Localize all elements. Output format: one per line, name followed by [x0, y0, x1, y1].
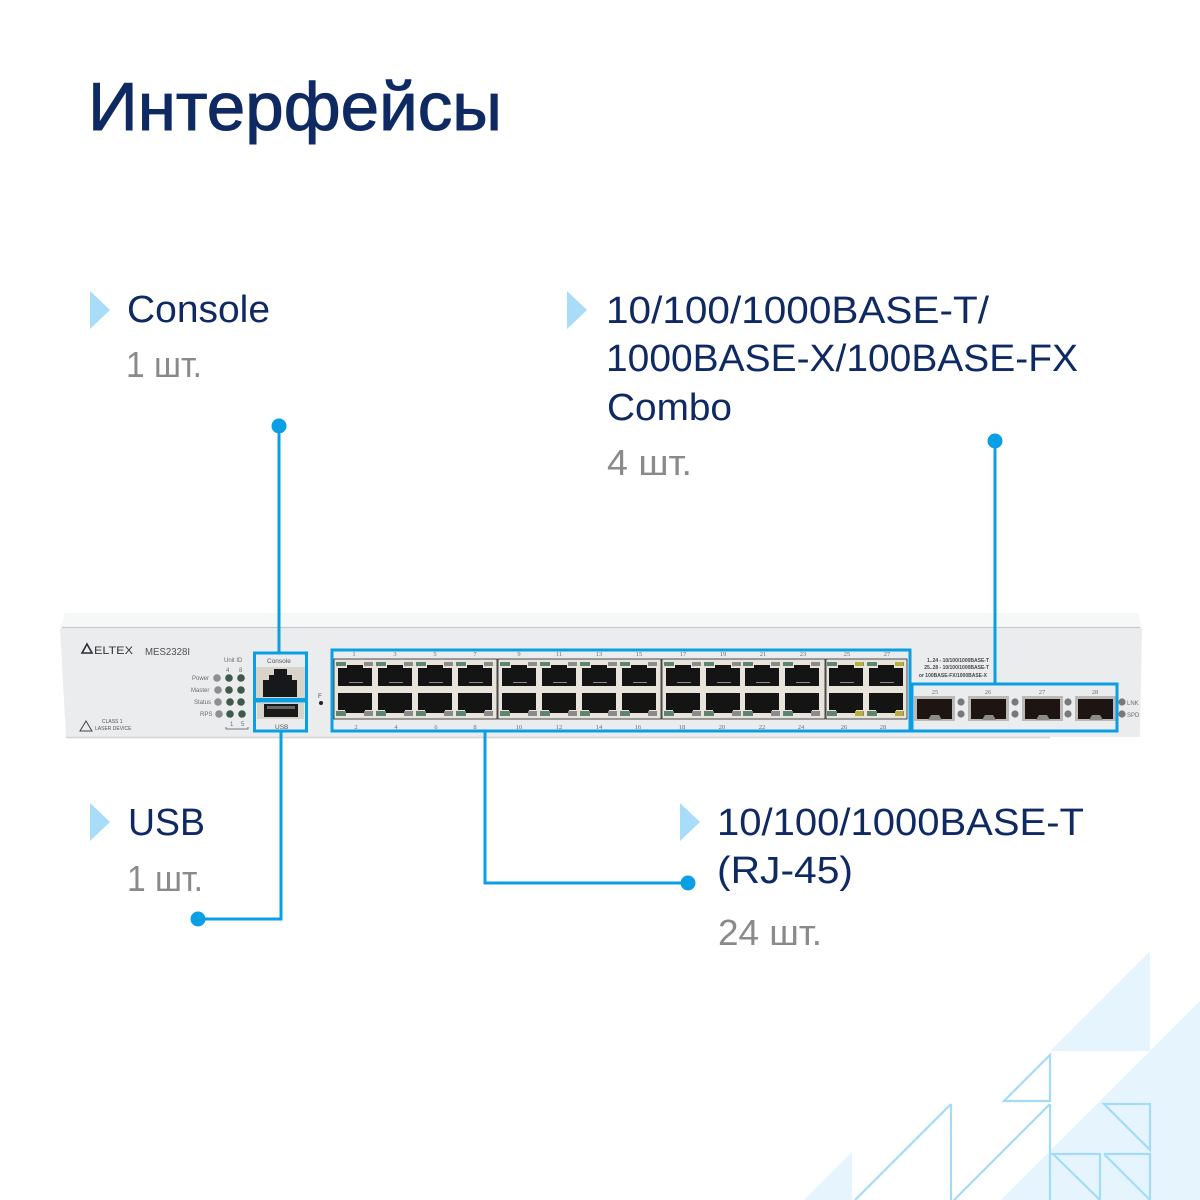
- status LEDs: Power: [192, 676, 209, 682]
- title: Интерфейсы: [88, 69, 502, 145]
- port numbers: 2: [354, 724, 358, 731]
- SFP ports: LNK: [1127, 701, 1139, 707]
- RJ-45 port groups: [334, 659, 907, 719]
- port numbers: 27: [884, 651, 891, 658]
- status LEDs: RPS: [200, 712, 212, 718]
- port numbers: 14: [596, 724, 603, 731]
- callout: USB: [90, 802, 205, 899]
- callout: Console: [90, 289, 270, 385]
- callout: RJ-45: (RJ-45): [717, 850, 853, 892]
- SFP ports: [914, 689, 1140, 721]
- status LEDs: 1: [230, 722, 234, 728]
- SFP ports: 27: [1039, 689, 1046, 696]
- port numbers: 21: [760, 651, 766, 658]
- port numbers: 15: [636, 651, 642, 658]
- connector: RJ-45: [485, 731, 696, 890]
- port numbers: 24: [798, 724, 805, 731]
- status LEDs: Unit ID: [224, 658, 243, 664]
- laser warning: [80, 719, 132, 732]
- decorative triangles: [804, 951, 1200, 1200]
- connector: USB: [190, 731, 281, 926]
- callout: Combo: 4 шт.: [607, 442, 692, 483]
- laser warning: LASER DEVICE: [95, 726, 132, 732]
- console and USB ports: USB: [275, 724, 288, 731]
- brand and model: MES2328I: [145, 647, 190, 658]
- status LEDs: 8: [239, 668, 243, 674]
- SFP ports: 26: [985, 689, 992, 696]
- connector: Combo: [988, 434, 1002, 684]
- connector: Console: [272, 418, 286, 653]
- combo legend: [919, 658, 989, 679]
- port numbers: 11: [556, 651, 562, 658]
- brand and model: [82, 644, 190, 658]
- port numbers: 12: [556, 724, 562, 731]
- port numbers: 7: [473, 651, 477, 658]
- port numbers: 13: [596, 651, 602, 658]
- port numbers: 28: [880, 724, 886, 731]
- highlight frames: [254, 650, 1117, 731]
- status LEDs: Master: [191, 688, 209, 694]
- callout: RJ-45: [680, 802, 1084, 953]
- port numbers: 9: [517, 651, 521, 658]
- callout: RJ-45: 10/100/1000BASE-T: [717, 802, 1084, 844]
- port numbers: [352, 651, 891, 731]
- console and USB ports: Console: [267, 658, 291, 665]
- port numbers: 16: [635, 724, 642, 731]
- port numbers: 17: [680, 651, 687, 658]
- port numbers: 26: [841, 724, 848, 731]
- port numbers: 6: [434, 724, 438, 731]
- combo legend: or 100BASE-FX/1000BASE-X: [919, 673, 988, 679]
- port numbers: 19: [720, 651, 726, 658]
- status LEDs: Status: [194, 700, 211, 706]
- status LEDs: 4: [226, 668, 230, 674]
- port numbers: 10: [516, 724, 522, 731]
- port numbers: 5: [433, 651, 437, 658]
- switch device: [60, 613, 1142, 738]
- port numbers: 23: [800, 651, 806, 658]
- port numbers: 1: [352, 651, 356, 658]
- combo legend: 25..28 - 10/100/1000BASE-T: [924, 665, 989, 671]
- port numbers: 18: [679, 724, 685, 731]
- callout: RJ-45: 24 шт.: [718, 912, 822, 953]
- port numbers: 8: [473, 724, 477, 731]
- callout: USB: 1 шт.: [127, 858, 203, 899]
- port numbers: 3: [393, 651, 397, 658]
- callout: Combo: 1000BASE-X/100BASE-FX: [606, 338, 1078, 380]
- port numbers: 20: [719, 724, 725, 731]
- status LEDs: 5: [241, 722, 245, 728]
- port numbers: 22: [759, 724, 765, 731]
- SFP ports: SPD: [1127, 713, 1140, 719]
- callout: Combo: 10/100/1000BASE-T/: [606, 290, 989, 332]
- combo legend: 1..24 - 10/100/1000BASE-T: [927, 658, 989, 664]
- status LEDs: [191, 658, 248, 729]
- port numbers: 4: [394, 724, 398, 731]
- SFP ports: 28: [1092, 689, 1098, 696]
- console and USB ports: [256, 658, 305, 731]
- callout: Console: Console: [127, 289, 270, 331]
- callout: USB: USB: [128, 802, 205, 844]
- callout: Combo: [567, 290, 1078, 483]
- brand and model: ELTEX: [94, 645, 134, 657]
- laser warning: CLASS 1: [102, 719, 123, 725]
- callout: Console: 1 шт.: [126, 344, 202, 385]
- callout: Combo: Combo: [607, 387, 732, 429]
- F button: F: [318, 693, 322, 700]
- port numbers: 25: [844, 651, 850, 658]
- switch body: [60, 613, 1142, 738]
- F button: [318, 693, 323, 705]
- SFP ports: 25: [932, 689, 938, 696]
